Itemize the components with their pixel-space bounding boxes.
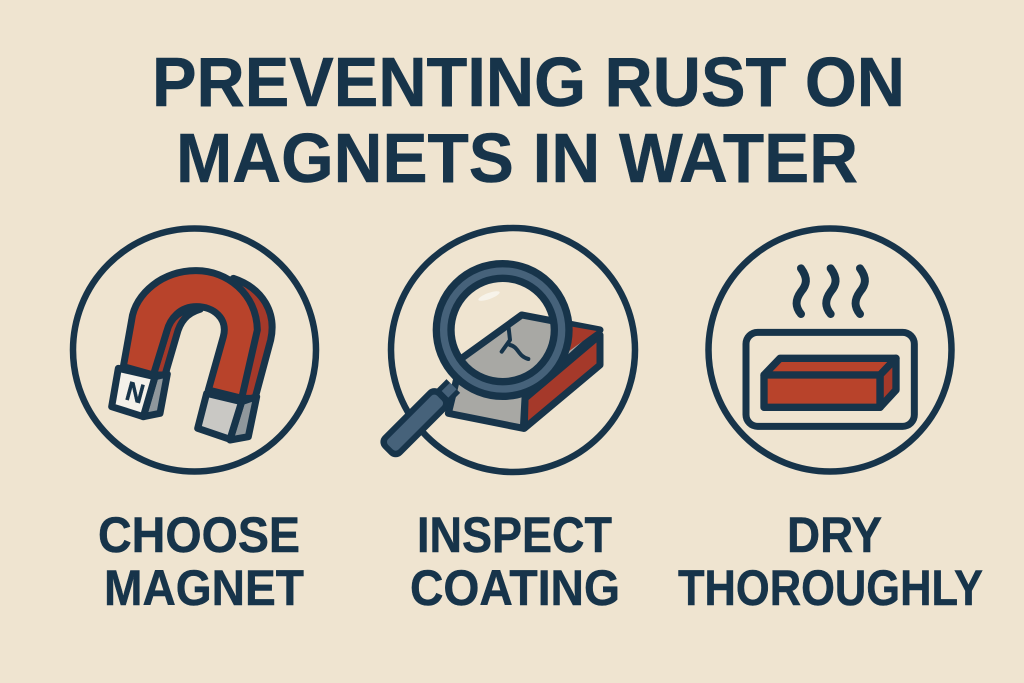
label: choose magnet: CHOOSE xyxy=(98,507,300,563)
panel: dry thoroughly xyxy=(678,228,983,616)
bar front face xyxy=(764,375,880,407)
panel: inspect coating xyxy=(377,228,635,616)
label: inspect coating xyxy=(410,507,620,616)
magnifier handle xyxy=(377,384,453,461)
title: PREVENTING RUST ON xyxy=(152,43,905,121)
bar top face xyxy=(764,358,896,375)
bar end face xyxy=(880,358,896,407)
icon circle: magnet xyxy=(73,228,316,472)
block front side xyxy=(524,335,600,428)
magnifier neck xyxy=(443,386,453,396)
icon: coated block under magnifying glass xyxy=(377,264,600,461)
exposed rust patch xyxy=(568,326,597,352)
label: dry thoroughly: THOROUGHLY xyxy=(678,560,983,616)
icon circle: inspect xyxy=(391,228,635,472)
block top coating xyxy=(448,315,600,428)
title: MAGNETS IN WATER xyxy=(176,119,858,197)
lens rim xyxy=(444,271,562,389)
title xyxy=(152,43,905,197)
tray outline xyxy=(746,332,914,426)
label: inspect coating: COATING xyxy=(410,560,620,616)
label: dry thoroughly: DRY xyxy=(787,507,882,563)
icon: drying magnet with steam xyxy=(746,268,914,426)
steam waves xyxy=(796,268,865,314)
coating crack xyxy=(502,325,528,359)
label: choose magnet: MAGNET xyxy=(104,560,304,616)
label: inspect coating: INSPECT xyxy=(417,507,612,563)
icon circle: dry xyxy=(708,228,952,472)
panel: choose magnet xyxy=(73,228,316,616)
icon: horseshoe magnet xyxy=(112,271,272,440)
label: dry thoroughly xyxy=(678,507,983,616)
label: choose magnet xyxy=(98,507,304,616)
lens glare xyxy=(477,289,501,303)
magnet pole letter: N xyxy=(122,376,148,409)
